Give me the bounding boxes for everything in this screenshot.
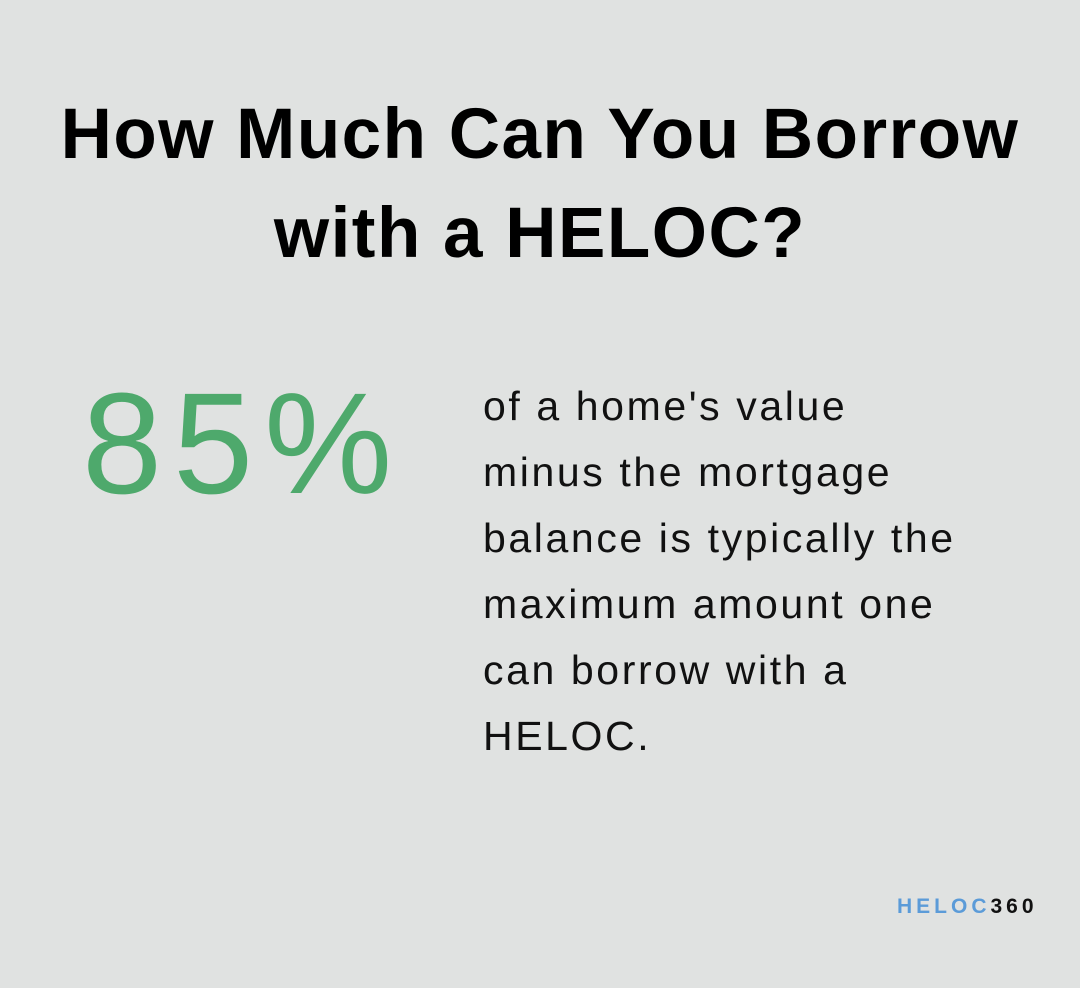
description text: HELOC. [483,713,651,759]
description text: of a home's value [483,383,847,429]
description text [483,383,956,759]
big stat: 85% [82,363,403,524]
description text: maximum amount one [483,581,935,627]
title [61,95,1019,273]
description text: balance is typically the [483,515,956,561]
title: How Much Can You Borrow [61,95,1019,174]
logo: HELOC360 [897,895,1038,918]
title: with a HELOC? [274,194,806,273]
description text: minus the mortgage [483,449,892,495]
description text: can borrow with a [483,647,849,693]
